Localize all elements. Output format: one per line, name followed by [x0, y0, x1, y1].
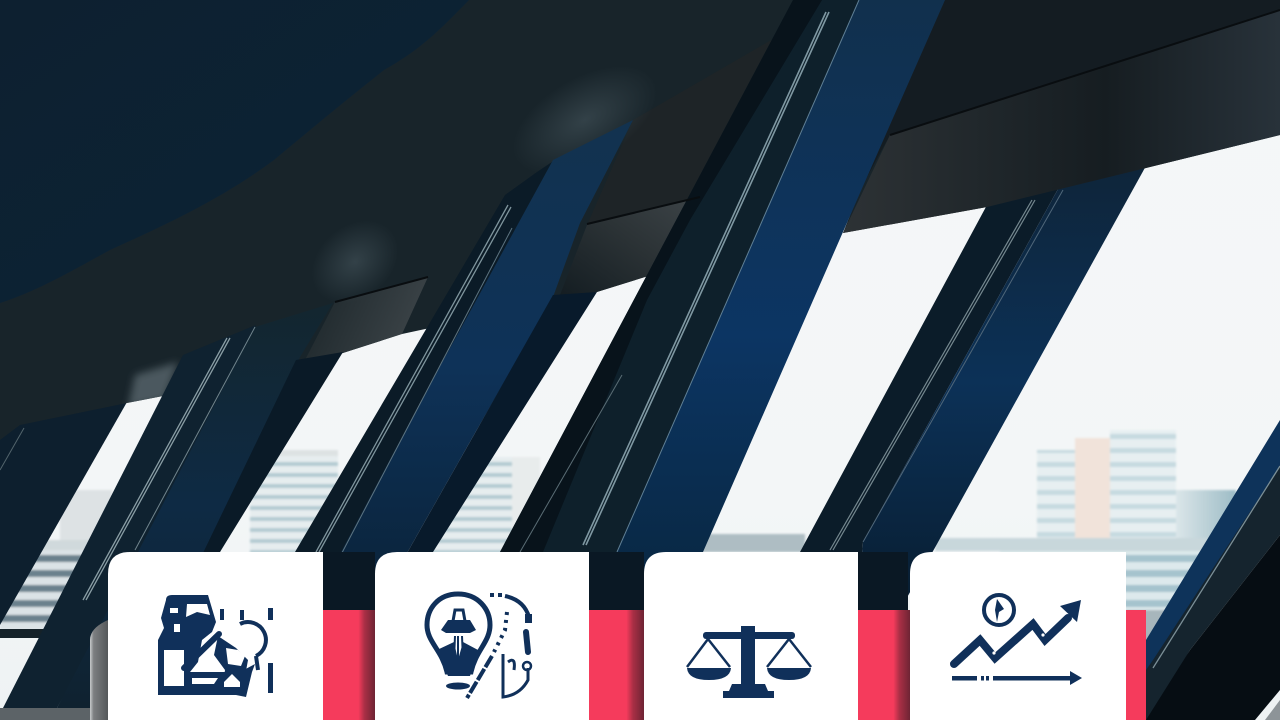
- beam shadow at card gaps: [323, 552, 908, 610]
- ceiling section: between centre beams: [587, 10, 840, 225]
- ceiling glow: near beam B: [324, 232, 387, 292]
- icon: documents, tools and bulb: [158, 595, 273, 697]
- red band: gap 1: [323, 610, 375, 720]
- ceiling glow: near beam C: [532, 81, 638, 160]
- icon: rising growth arrow: [952, 595, 1082, 685]
- ceiling panel: recessed navy: [0, 0, 469, 303]
- ceiling section: upper right: [840, 0, 1280, 190]
- red band: gap 2: [589, 610, 644, 720]
- card 2: [375, 552, 589, 720]
- ceiling: [0, 0, 1280, 460]
- soffit: lit plane behind beam C: [577, 202, 686, 292]
- beam C: centre-left diagonal: [295, 120, 633, 610]
- beam E: centre-right diagonal: [800, 155, 1152, 610]
- skyline: distant buildings: [0, 430, 1236, 655]
- beam B: left diagonal: [3, 303, 343, 715]
- band: overhead beam at right: [843, 10, 1280, 233]
- card 3: [644, 552, 858, 720]
- bottom-left floor strip: [0, 708, 92, 720]
- icon: balance scales: [687, 626, 811, 698]
- soffit: lit plane far left: [128, 362, 178, 408]
- card 1: [108, 552, 323, 720]
- beam F: right corner diagonal: [1146, 420, 1280, 720]
- beam D: centre diagonal: [500, 0, 945, 610]
- soffit: lit plane behind beam B: [305, 277, 428, 360]
- ledge: lower-left window sill: [0, 629, 60, 638]
- icon: lightbulb with circuit: [427, 594, 532, 698]
- red band: gap 4: [1126, 610, 1146, 720]
- ceiling lines: [335, 10, 1280, 302]
- beam A: far left: [0, 390, 127, 625]
- card 4: [910, 552, 1126, 720]
- red band: gap 3: [858, 610, 910, 720]
- back card: grey: [90, 620, 108, 720]
